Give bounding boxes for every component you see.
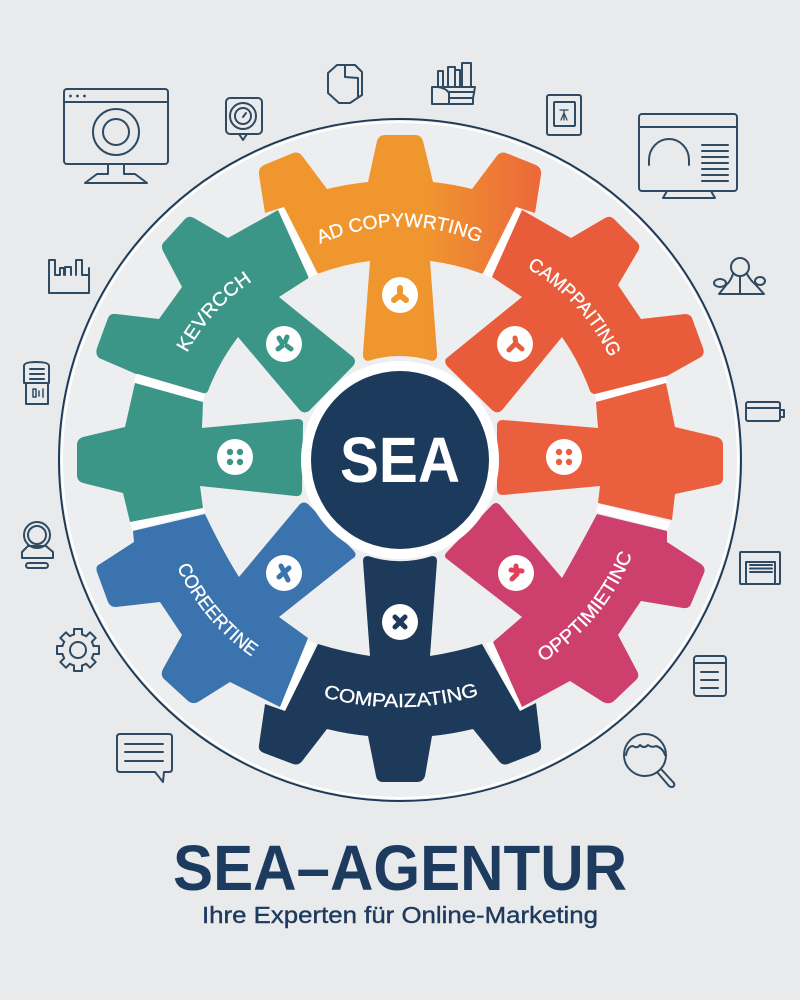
icon: magnifier <box>624 734 674 787</box>
panel: red upper gear segment campaign: CAMPPAITING <box>530 259 620 356</box>
icon: monitor with profile <box>639 114 737 198</box>
icon: small camera badge <box>226 98 262 140</box>
panel: orange gear segment ad copywriting: AD COPYWRTING <box>320 213 482 244</box>
panel: blue gear segment <box>96 502 356 707</box>
white separators between gear segments <box>131 207 669 710</box>
panel: pink gear segment optimizing <box>445 503 705 707</box>
icon: person group <box>714 258 765 294</box>
icon: monitor with camera <box>64 89 168 183</box>
icon: webcam <box>22 522 53 568</box>
icon: camera box <box>746 402 784 421</box>
icon: browser window <box>740 552 780 584</box>
panel: navy gear segment: COMPAIZATING <box>325 684 478 708</box>
outer ring circle <box>59 119 741 801</box>
panel: pink gear segment optimizing: OPPTIMIETINC <box>538 551 631 660</box>
panel: red lower gear segment <box>497 383 723 520</box>
center hub SEA <box>301 361 499 559</box>
icon: bar chart box <box>49 260 89 293</box>
icon: chat bubble <box>117 734 172 782</box>
panel: orange gear segment ad copywriting <box>258 135 542 361</box>
icon: framed tile <box>547 95 581 135</box>
icon: server device <box>24 362 49 404</box>
icon: gear <box>57 629 99 671</box>
panel: teal lower gear segment <box>77 383 303 522</box>
icon: document octagon <box>328 65 362 103</box>
panel: navy gear segment <box>258 556 542 782</box>
panel: teal gear segment research <box>96 210 355 412</box>
title: SEA–AGENTUR <box>173 832 627 904</box>
panel: blue gear segment: COREERTINE <box>178 564 259 656</box>
icon: notes document <box>694 656 726 696</box>
subtitle: Ihre Experten für Online-Marketing <box>202 902 598 928</box>
panel: teal gear segment research: KEVRCCH <box>176 271 252 352</box>
icon: hand with bars <box>432 63 475 104</box>
panel: red upper gear segment campaign <box>445 210 704 412</box>
center hub SEA: SEA <box>340 424 460 496</box>
